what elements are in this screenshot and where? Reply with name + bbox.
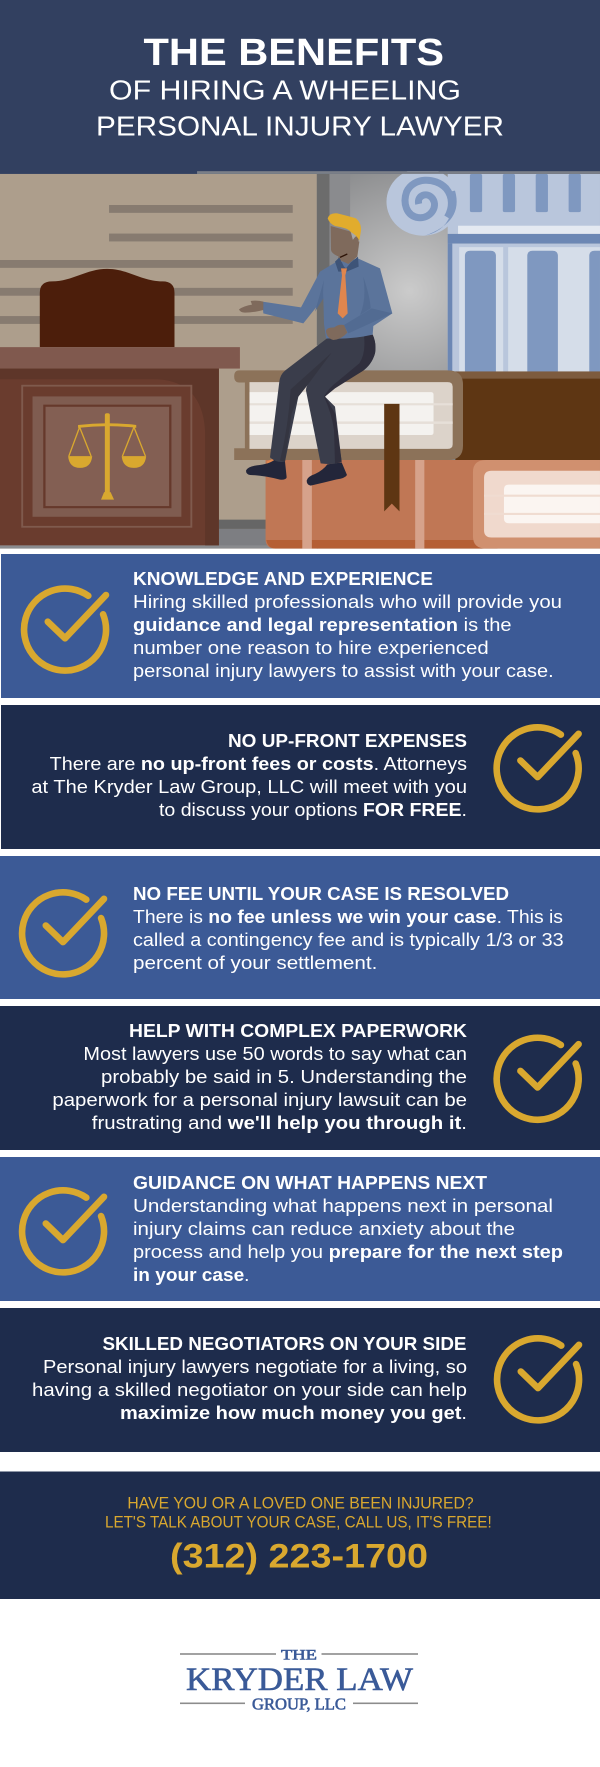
panel text: called a contingency fee and is typically 1/3 or 33	[133, 930, 564, 950]
icon: check circle	[497, 1338, 579, 1420]
sock	[267, 458, 277, 468]
panel text: HELP WITH COMPLEX PAPERWORK	[129, 1021, 467, 1041]
panel: knowledge and experience	[1, 554, 600, 698]
icon: check circle	[22, 1190, 104, 1272]
title	[96, 32, 504, 142]
panel text	[133, 569, 562, 681]
panel text: Personal injury lawyers negotiate for a living, so	[43, 1357, 467, 1377]
trousers	[270, 335, 375, 464]
judge chair	[40, 269, 174, 347]
panel text: Understanding what happens next in personal	[133, 1196, 553, 1216]
panel text: NO UP-FRONT EXPENSES	[228, 731, 467, 751]
panel text: frustrating and we'll help you through it .	[92, 1113, 467, 1133]
panel text: paperwork for a personal injury lawsuit can be	[52, 1090, 467, 1110]
hands	[239, 301, 347, 340]
panel text	[31, 731, 467, 820]
column	[386, 168, 600, 372]
lower book	[266, 460, 600, 549]
upper book	[234, 370, 600, 460]
panel: no up-front expenses	[1, 705, 600, 849]
illustration: courtroom scene	[0, 168, 600, 549]
icon: check circle	[22, 892, 104, 974]
title: PERSONAL INJURY LAWYER	[96, 111, 504, 142]
tie	[338, 268, 348, 318]
panel text: SKILLED NEGOTIATORS ON YOUR SIDE	[102, 1334, 466, 1354]
panel: skilled negotiators	[0, 1308, 600, 1452]
title: OF HIRING A WHEELING	[109, 74, 461, 105]
icon: scales of justice	[68, 413, 146, 500]
panel text: Most lawyers use 50 words to say what can	[83, 1044, 467, 1064]
panel text	[133, 1173, 563, 1285]
panel text: to discuss your options FOR FREE .	[159, 800, 467, 820]
panel text: process and help you prepare for the next step	[133, 1242, 563, 1262]
panel text: probably be said in 5. Understanding the	[101, 1067, 467, 1087]
logo: The Kryder Law Group: THE	[281, 1647, 317, 1663]
panel text	[52, 1021, 467, 1133]
phone number: (312) 223-1700	[170, 1537, 428, 1575]
panel: complex paperwork	[0, 1006, 600, 1150]
panel text: at The Kryder Law Group, LLC will meet with you	[31, 777, 467, 797]
figure: seated lawyer	[239, 213, 392, 486]
panel text: NO FEE UNTIL YOUR CASE IS RESOLVED	[133, 884, 509, 904]
icon: check circle	[24, 589, 106, 671]
panel text: personal injury lawyers to assist with your case.	[133, 661, 554, 681]
shoes	[246, 459, 347, 486]
bookmark	[384, 404, 399, 511]
icon: check circle	[497, 727, 579, 809]
panel text: GUIDANCE ON WHAT HAPPENS NEXT	[133, 1173, 487, 1193]
logo: The Kryder Law Group: GROUP, LLC	[252, 1694, 346, 1713]
wall text lines	[0, 205, 293, 324]
judge bench	[0, 347, 240, 545]
panel: no fee until resolved	[0, 856, 600, 999]
collar	[335, 257, 359, 272]
panel text: percent of your settlement.	[133, 953, 377, 973]
panel text	[133, 884, 564, 973]
call to action text line 2: LET'S TALK ABOUT YOUR CASE, CALL US, IT'S FREE!	[105, 1513, 492, 1531]
logo: The Kryder Law Group	[180, 1647, 418, 1713]
header banner	[0, 0, 600, 174]
call to action banner	[0, 1472, 600, 1599]
shirt	[262, 259, 392, 339]
panel text: having a skilled negotiator on your side can help	[32, 1380, 467, 1400]
mouth	[340, 254, 347, 257]
panel text: guidance and legal representation is the	[133, 615, 511, 635]
panel text: injury claims can reduce anxiety about the	[133, 1219, 515, 1239]
icon: check circle	[497, 1038, 579, 1120]
panel text: maximize how much money you get .	[120, 1403, 467, 1423]
panel text: Hiring skilled professionals who will provide you	[133, 592, 562, 612]
call to action text: HAVE YOU OR A LOVED ONE BEEN INJURED?	[127, 1494, 474, 1512]
neck and head	[331, 226, 359, 264]
panel text: There are no up-front fees or costs . Attorneys	[50, 754, 467, 774]
title: THE BENEFITS	[144, 32, 444, 74]
column scroll spiral	[405, 180, 457, 236]
panel text	[32, 1334, 467, 1423]
panel text: KNOWLEDGE AND EXPERIENCE	[133, 569, 433, 589]
panel text: There is no fee unless we win your case . This is	[133, 907, 563, 927]
panel text: in your case .	[133, 1265, 250, 1285]
panel: guidance on what happens next	[0, 1157, 600, 1301]
hair	[328, 213, 361, 241]
panel text: number one reason to hire experienced	[133, 638, 489, 658]
logo: The Kryder Law Group: KRYDER LAW	[186, 1662, 413, 1698]
